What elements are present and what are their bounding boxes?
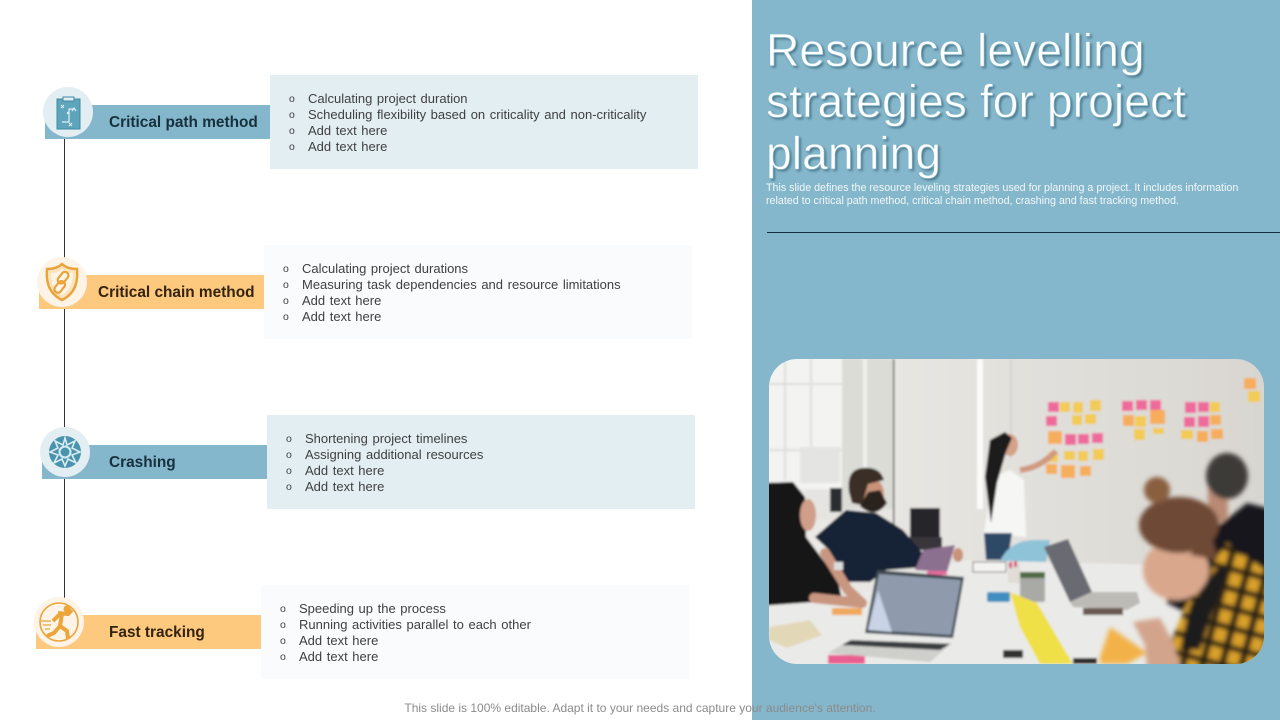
- standing woman: [984, 470, 1026, 537]
- title: strategies for project: [766, 75, 1186, 127]
- label: critical path method: Critical path method: [109, 114, 258, 130]
- bullet list: Speeding up the process: [299, 600, 446, 616]
- row: crashing: [40, 415, 695, 509]
- bullet list: Measuring task dependencies and resource limitations: [302, 276, 621, 292]
- front laptop: [828, 640, 952, 662]
- bullet list: [283, 260, 621, 324]
- label band: [45, 105, 270, 138]
- timeline connector line: [64, 137, 65, 601]
- label: crashing: Crashing: [109, 454, 176, 470]
- sticky notes: [1046, 378, 1260, 478]
- row: fast tracking: [34, 597, 531, 664]
- icon: clipboard: [43, 87, 93, 137]
- row: critical chain method: [37, 257, 621, 324]
- label: critical chain method: Critical chain method: [98, 284, 254, 300]
- label band: [36, 615, 261, 648]
- seated man: [815, 510, 926, 582]
- bullet list: Running activities parallel to each other: [299, 616, 531, 632]
- orange paper: [1100, 627, 1147, 664]
- bullet list: [286, 430, 483, 494]
- bullet list: Assigning additional resources: [305, 446, 483, 462]
- bullet list: Add text here: [308, 122, 387, 138]
- text panel: [264, 245, 692, 339]
- bullet list: Scheduling flexibility based on criticality and non-criticality: [308, 106, 646, 122]
- title: planning: [766, 126, 941, 178]
- description text: [766, 182, 1238, 207]
- label band: [42, 445, 267, 478]
- icon: runner: [34, 597, 84, 647]
- back desk: [910, 508, 940, 537]
- label band: [39, 275, 264, 308]
- pot: [1020, 577, 1045, 602]
- right blue panel: [752, 0, 1280, 720]
- icon: shield with broken chain: [37, 257, 87, 307]
- bullet list: Add text here: [308, 138, 387, 154]
- yellow paper: [1010, 592, 1073, 664]
- bullet list: [289, 90, 646, 154]
- description text: related to critical path method, critical chain method, crashing and fast tracking method.: [766, 195, 1179, 207]
- purple laptop: [915, 545, 955, 572]
- title: Resource levelling: [766, 24, 1145, 76]
- blonde woman: [1168, 539, 1264, 664]
- bullet list: Add text here: [299, 648, 378, 664]
- team meeting photo: [769, 359, 1264, 664]
- bullet list: Add text here: [305, 462, 384, 478]
- bullet list: Calculating project duration: [308, 90, 468, 106]
- text panel: [270, 75, 698, 169]
- blue chair: [1000, 540, 1050, 562]
- icon: crash burst: [40, 427, 90, 477]
- papers and notes: [769, 620, 822, 648]
- bullet list: [280, 600, 531, 664]
- footer note: This slide is 100% editable. Adapt it to your needs and capture your audience's attention.: [404, 701, 876, 715]
- label: fast tracking: Fast tracking: [109, 624, 205, 640]
- bullet list: Add text here: [305, 478, 384, 494]
- right man: [1167, 503, 1275, 613]
- bullet list: Add text here: [302, 292, 381, 308]
- table: [926, 561, 1183, 664]
- text panel: [261, 585, 689, 679]
- back right laptop: [1044, 539, 1092, 602]
- bullet list: Shortening project timelines: [305, 430, 467, 446]
- row: critical path method: [43, 75, 698, 169]
- text panel: [267, 415, 695, 509]
- left woman: [760, 482, 842, 606]
- bullet list: Add text here: [302, 308, 381, 324]
- description text: This slide defines the resource leveling strategies used for planning a project. It includes information: [766, 182, 1238, 194]
- bullet list: Add text here: [299, 632, 378, 648]
- header divider line: [767, 232, 1280, 233]
- title: [766, 24, 1188, 182]
- bullet list: Calculating project durations: [302, 260, 468, 276]
